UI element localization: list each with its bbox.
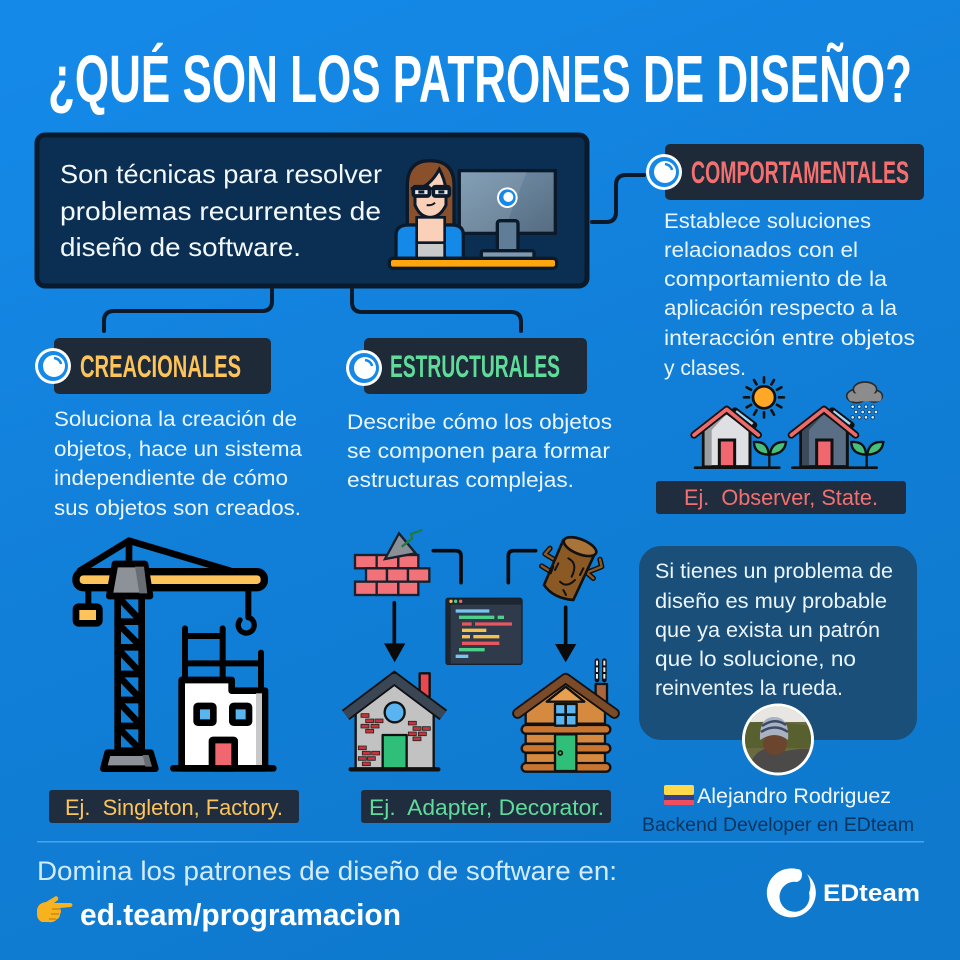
- text: estructurales description: se componen para formar: [347, 440, 610, 463]
- text: estructurales description: estructuras complejas.: [347, 469, 574, 492]
- example: singleton, factory: Ej. Singleton, Factory.: [65, 795, 283, 820]
- call to action text: Domina los patrones de diseño de software en:: [37, 856, 617, 886]
- connectors from definition box: [104, 175, 644, 331]
- text: comportamentales description: Establece soluciones: [664, 210, 871, 233]
- heading: estructurales: ESTRUCTURALES: [390, 348, 560, 384]
- panel: estructurales: [346, 338, 614, 823]
- icon: brick wall and trowel: [355, 530, 429, 595]
- diagram: adapter and decorator: [346, 530, 614, 772]
- icon: pointing hand: [37, 896, 72, 922]
- icon: brick house: [346, 673, 443, 770]
- example: observer, state: [656, 481, 906, 514]
- sunny house: [694, 409, 786, 467]
- text: estructurales description: [347, 411, 612, 492]
- text: creacionales description: independiente de cómo: [54, 467, 288, 490]
- logo: EDteam: [767, 868, 920, 917]
- text: comportamentales description: aplicación respecto a la: [664, 297, 897, 320]
- definition text: problemas recurrentes de: [60, 196, 381, 226]
- definition text: [60, 159, 382, 262]
- icon: houses in sun and rain: [694, 377, 883, 468]
- icon: colombian flag: [664, 785, 694, 805]
- text: comportamentales description: relacionados con el: [664, 239, 858, 262]
- author name: Alejandro Rodriguez: [697, 785, 891, 808]
- icon: log cabin: [518, 661, 614, 772]
- text: creacionales description: objetos, hace un sistema: [54, 438, 302, 461]
- heading: creacionales: CREACIONALES: [80, 348, 241, 384]
- callout: advice quote: que ya exista un patrón: [655, 619, 880, 642]
- panel: comportamentales: [646, 144, 924, 514]
- definition text: diseño de software.: [60, 232, 301, 262]
- author role: Backend Developer en EDteam: [642, 815, 914, 836]
- panel: creacionales: [35, 338, 302, 823]
- example: singleton, factory: [49, 790, 299, 823]
- heading: estructurales: [346, 338, 587, 394]
- heading: comportamentales: [646, 144, 924, 200]
- callout: advice quote: diseño es muy probable: [655, 590, 887, 613]
- definition text: Son técnicas para resolver: [60, 159, 382, 189]
- icon: log: [542, 533, 602, 600]
- callout: advice quote: reinventes la rueda.: [655, 677, 843, 700]
- callout: advice quote: [639, 546, 917, 740]
- heading: creacionales: [35, 338, 271, 394]
- panel: definition: [37, 135, 587, 286]
- text: creacionales description: [54, 408, 302, 520]
- callout: advice quote: Si tienes un problema de: [655, 560, 893, 583]
- callout: advice quote: que lo solucione, no: [655, 648, 856, 671]
- text: comportamentales description: [664, 210, 915, 380]
- logo: EDteam: EDteam: [823, 880, 920, 907]
- example: adapter, decorator: Ej. Adapter, Decorator.: [369, 795, 604, 820]
- icon: code window: [446, 598, 522, 664]
- text: estructurales description: Describe cómo los objetos: [347, 411, 612, 434]
- text: creacionales description: sus objetos son creados.: [54, 497, 301, 520]
- text: creacionales description: Soluciona la creación de: [54, 408, 297, 431]
- author portrait: [742, 704, 815, 776]
- text: comportamentales description: comportamiento de la: [664, 268, 887, 291]
- text: comportamentales description: interacción entre objetos: [664, 327, 915, 350]
- example: adapter, decorator: [361, 790, 611, 823]
- icon: developer at computer: [389, 161, 557, 268]
- link: ed.team/programacion: [80, 897, 401, 932]
- rainy house: [791, 409, 883, 467]
- icon: crane and building: [76, 541, 273, 769]
- text: comportamentales description: y clases.: [664, 357, 746, 380]
- example: observer, state: Ej. Observer, State.: [684, 485, 878, 510]
- bracket arrows: [394, 551, 566, 645]
